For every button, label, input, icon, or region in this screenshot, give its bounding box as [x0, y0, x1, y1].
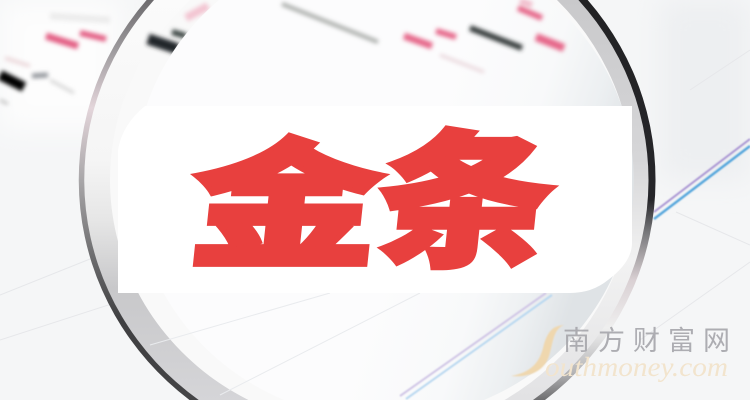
blurred candlesticks inside lens [282, 1, 564, 72]
lens bright disc [134, 0, 634, 400]
title panel [118, 106, 632, 293]
blurred candlesticks outside lens [0, 16, 110, 104]
watermark swoosh S [511, 325, 564, 376]
watermark: 南方财富网 Southmoney.com [511, 319, 738, 382]
magnifying glass outer ring [79, 0, 656, 400]
faint grid lines in lens [150, 293, 420, 395]
chart trend lines [400, 139, 750, 399]
title: 金条 [181, 84, 568, 297]
title: 金条: 条 [367, 84, 568, 297]
watermark chinese name: 南方财富网 [563, 319, 738, 358]
title: 金条: 金 [181, 96, 394, 294]
lens band and dark candlestick [81, 0, 653, 400]
watermark domain: outhmoney.com [545, 352, 728, 382]
